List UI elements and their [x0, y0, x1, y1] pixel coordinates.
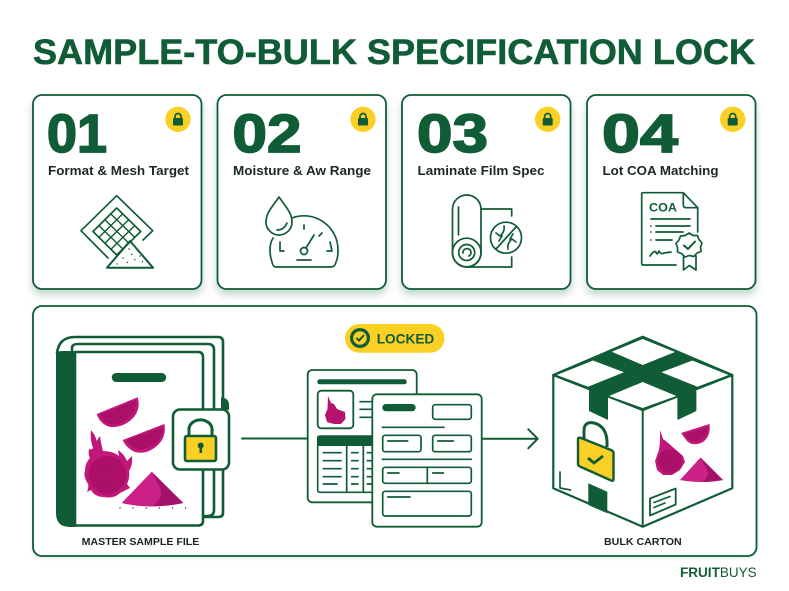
arrow: file to documents	[242, 438, 308, 440]
logo: FruitBuys: FRUITBUYS	[680, 565, 757, 580]
label 02: Moisture & Aw Range	[233, 163, 371, 178]
number 03: 03	[417, 104, 488, 164]
thumbnail dragon fruit	[325, 396, 346, 424]
lock badge 01	[165, 107, 191, 132]
whole dragon fruit	[84, 430, 132, 498]
icon: COA document with seal	[642, 193, 702, 270]
document: form sheet	[372, 394, 482, 527]
icon: mesh sieve and powder pile	[81, 196, 153, 268]
lock badge 02	[350, 107, 376, 132]
carton lock	[578, 423, 614, 481]
label 03: Laminate Film Spec	[418, 163, 544, 178]
carton tape strips	[588, 388, 696, 513]
carton fruit graphics	[655, 424, 723, 482]
caption: bulk carton: BULK CARTON	[604, 536, 682, 548]
carton shipping label	[650, 488, 676, 516]
icon: water drop and gauge	[266, 197, 338, 267]
carton body	[553, 375, 732, 527]
lock tag	[173, 398, 229, 470]
lock badge 03	[535, 107, 560, 132]
label 01: Format & Mesh Target	[48, 163, 190, 178]
panel: 04 lot coa matching	[587, 95, 756, 289]
panel: 03 laminate film spec	[402, 95, 570, 289]
locked badge: LOCKED	[377, 330, 434, 346]
binder title bar	[112, 373, 166, 382]
number 04: 04	[602, 104, 678, 164]
locked badge	[345, 324, 444, 353]
icon: master sample binder	[56, 337, 229, 527]
icon: COA document with seal: COA	[649, 202, 677, 214]
panel: specification flow	[33, 306, 756, 556]
lock badge 04	[720, 107, 745, 132]
powder pile	[120, 472, 186, 508]
label 04: Lot COA Matching	[602, 163, 719, 178]
panel: 02 moisture and aw range	[218, 95, 386, 289]
caption: master sample file: MASTER SAMPLE FILE	[82, 536, 199, 548]
icon: bulk carton	[553, 337, 732, 527]
number 01: 01	[47, 104, 107, 164]
arrow: documents to carton	[482, 429, 538, 448]
carton top with tape	[553, 337, 732, 410]
dragon fruit slices	[97, 397, 165, 453]
number 02: 02	[232, 104, 302, 164]
icon: film roll and cross section	[452, 195, 522, 267]
panel: 01 format and mesh target	[33, 95, 202, 289]
title: SAMPLE-TO-BULK SPECIFICATION LOCK	[33, 33, 755, 72]
carton corner mark	[560, 472, 570, 490]
document: specification sheet	[308, 370, 417, 502]
